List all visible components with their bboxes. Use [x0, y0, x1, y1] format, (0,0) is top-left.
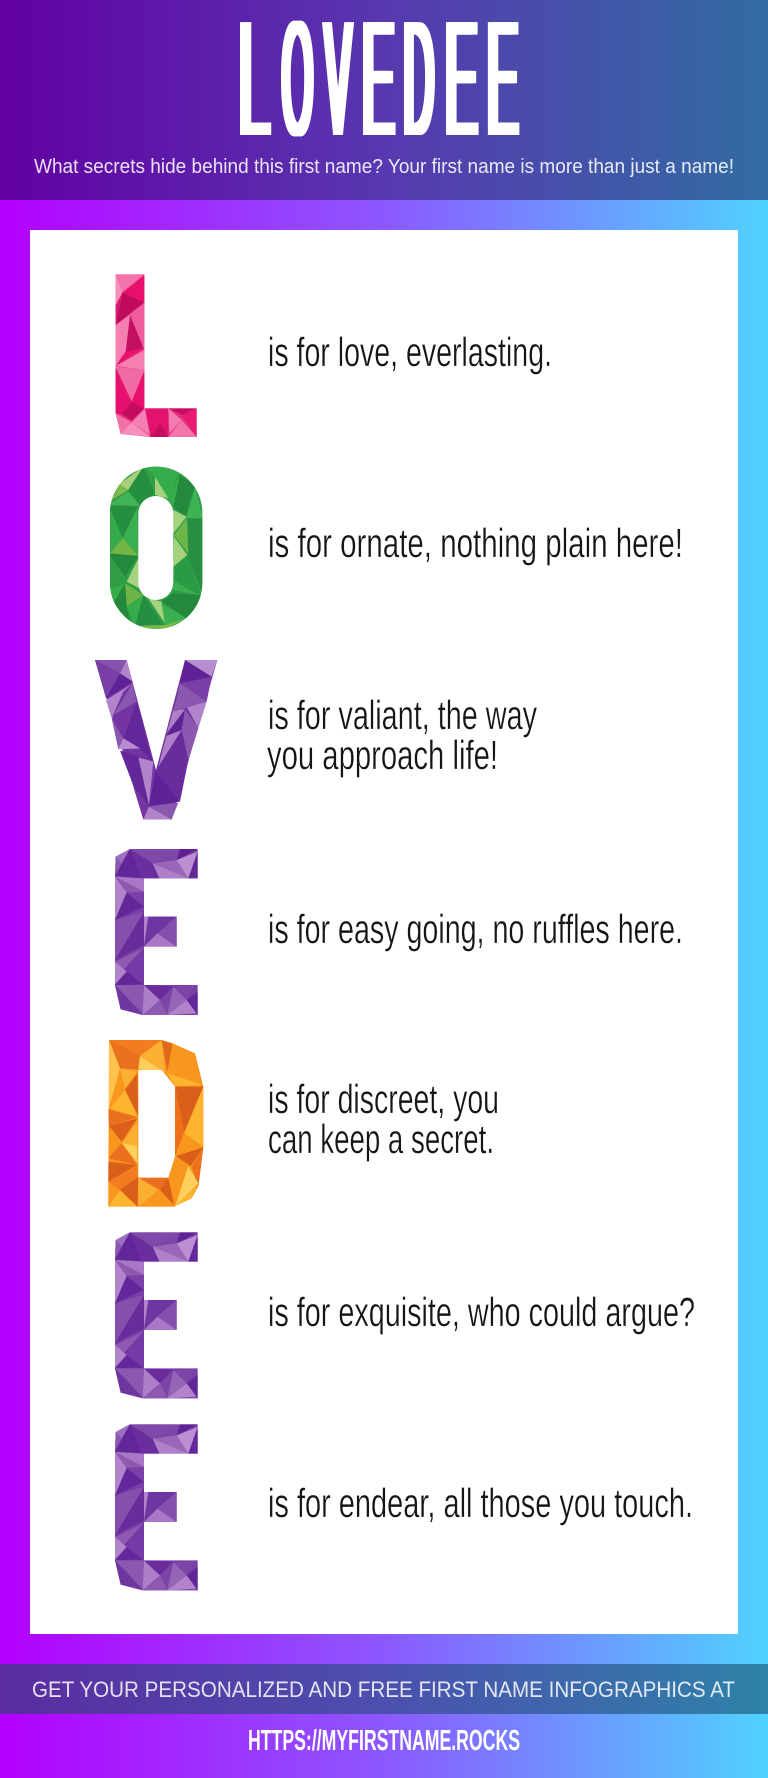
footer band — [0, 1664, 768, 1714]
white content panel — [30, 230, 738, 1634]
polygon letter L — [116, 274, 197, 437]
statement for V — [267, 692, 537, 778]
subtitle: What secrets hide behind this first name? Your first name is more than just a name! — [34, 156, 734, 178]
header band — [0, 0, 768, 200]
statement for D: can keep a secret. — [268, 1116, 494, 1162]
statement for D: is for discreet, you — [268, 1076, 499, 1122]
footer call to action: GET YOUR PERSONALIZED AND FREE FIRST NAME INFOGRAPHICS AT — [32, 1677, 735, 1702]
polygon letter O — [108, 465, 205, 632]
polygon letter E third — [115, 1424, 198, 1590]
polygon letter V — [95, 660, 217, 819]
footer url: HTTPS://MYFIRSTNAME.ROCKS — [248, 1725, 520, 1757]
statement for L: is for love, everlasting. — [268, 329, 552, 375]
polygon letter E — [115, 849, 198, 1015]
title — [238, 0, 518, 171]
statement for V: is for valiant, the way — [268, 692, 537, 738]
statement for V: you approach life! — [267, 732, 498, 778]
statement for D — [268, 1076, 499, 1162]
polygon letter E second — [115, 1232, 198, 1398]
polygon letter D — [108, 1040, 203, 1207]
